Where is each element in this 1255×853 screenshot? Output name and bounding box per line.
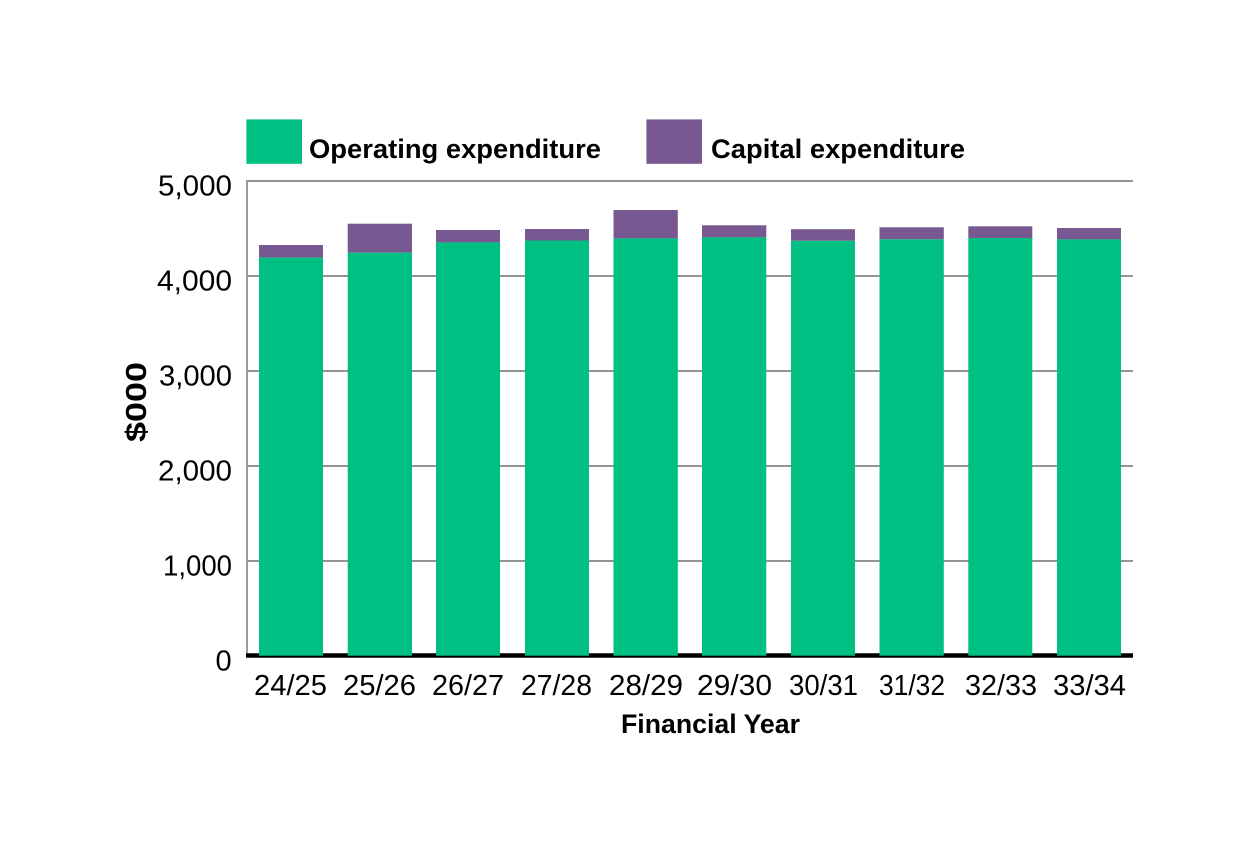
x axis labels: 31/32 <box>879 670 945 702</box>
y axis labels: 0 <box>216 646 232 678</box>
bar 25/26 <box>348 224 412 656</box>
y axis labels: 2,000 <box>158 456 232 488</box>
bar 26/27 <box>436 230 500 656</box>
x axis labels: 30/31 <box>789 670 858 702</box>
y axis labels: 5,000 <box>158 170 232 202</box>
bar 27/28 <box>525 229 589 656</box>
y axis title: $000 <box>121 362 153 442</box>
bar 32/33 <box>968 226 1032 656</box>
x axis labels <box>254 670 1126 702</box>
x axis labels: 28/29 <box>609 670 683 702</box>
bar 29/30 <box>702 225 766 656</box>
bar 31/32 <box>880 227 944 656</box>
y axis labels: 1,000 <box>163 550 232 582</box>
x axis title: Financial Year <box>621 709 800 739</box>
legend: operating expenditure <box>246 119 601 164</box>
x axis labels: 25/26 <box>343 670 416 702</box>
y axis labels: 4,000 <box>157 266 232 298</box>
bar 33/34 <box>1057 228 1121 656</box>
x axis labels: 26/27 <box>432 670 504 702</box>
x axis labels: 33/34 <box>1053 670 1126 702</box>
bar 24/25 <box>259 245 323 656</box>
x axis labels: 24/25 <box>254 670 327 702</box>
bar 28/29 <box>614 210 678 656</box>
legend: capital expenditure <box>646 119 965 164</box>
x axis labels: 27/28 <box>521 670 592 702</box>
x axis labels: 32/33 <box>965 670 1037 702</box>
legend <box>246 119 965 164</box>
bars <box>259 210 1121 656</box>
y axis labels <box>157 170 232 678</box>
bar 30/31 <box>791 229 855 656</box>
legend: operating expenditure: Operating expenditure <box>309 134 601 164</box>
legend: capital expenditure: Capital expenditure <box>711 134 965 164</box>
y axis labels: 3,000 <box>159 360 232 392</box>
x axis labels: 29/30 <box>697 670 772 702</box>
